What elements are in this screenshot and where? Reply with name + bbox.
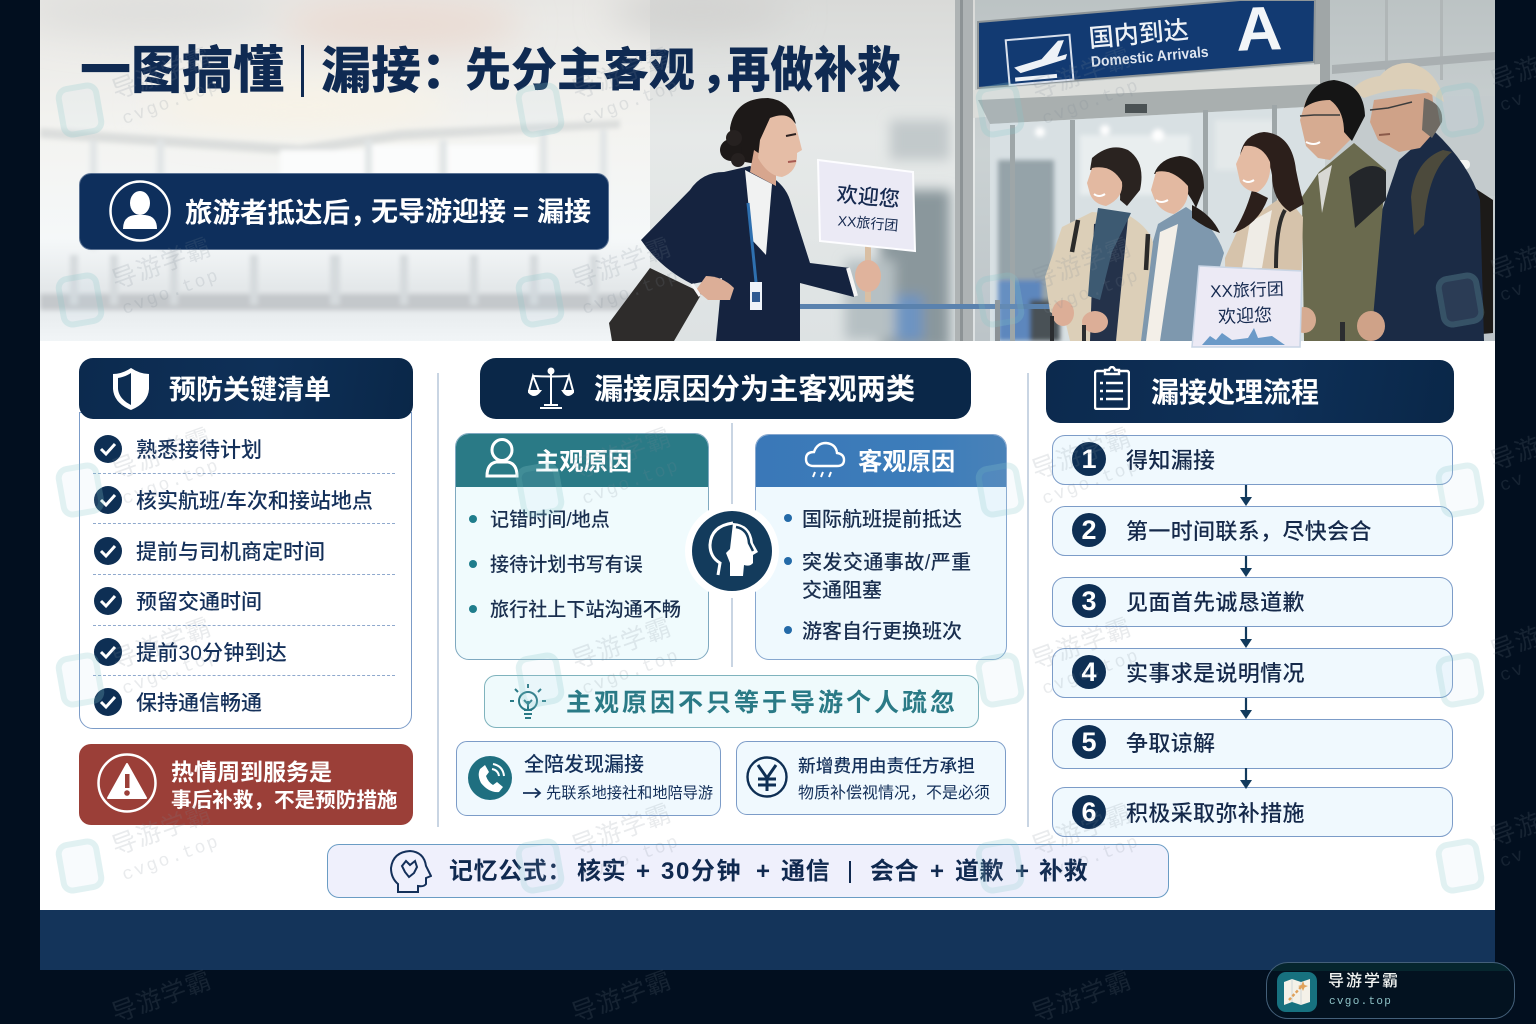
panel: objective causes: 交通阻塞 — [802, 580, 882, 602]
takeaway banner: 主观原因不只等于导游个人疏忽 — [566, 689, 958, 717]
process flow: 得知漏接 — [1126, 448, 1215, 473]
woman 2 — [1141, 156, 1224, 341]
process flow — [1052, 435, 1453, 837]
objective header: 客观原因 — [858, 449, 955, 476]
airport sign — [978, 0, 1315, 88]
man 1 — [1300, 80, 1386, 341]
card: extra cost: 物质补偿视情况，不是必须 — [798, 785, 990, 802]
icon: warning triangle — [97, 753, 157, 813]
group welcome sign: 欢迎您 — [1218, 301, 1272, 329]
watermark overlay: 导游学霸 — [568, 233, 675, 295]
watermark overlay: cvgo.top — [120, 456, 223, 510]
definition text — [185, 197, 591, 228]
panel: objective causes: 游客自行更换班次 — [802, 621, 962, 643]
icon: head split badge — [685, 504, 779, 598]
icon: clipboard — [1094, 366, 1130, 410]
watermark overlay: cv — [1497, 89, 1528, 117]
title: 一图搞懂 — [80, 42, 284, 99]
hero photo illustration: airport arrivals with guide and tour group — [40, 0, 1495, 348]
subjective header: 主观原因 — [535, 449, 632, 476]
formula text: + — [1015, 858, 1029, 885]
icon: bulb — [510, 684, 546, 719]
airport sign: Domestic Arrivals — [1090, 44, 1209, 71]
title: 漏接： — [321, 43, 471, 99]
callout: warning — [79, 744, 413, 825]
formula text: 通信 — [781, 858, 830, 885]
watermark overlay: 导游学霸 — [108, 233, 215, 295]
icon: phone — [468, 756, 512, 800]
watermark overlay: cvgo.top — [580, 456, 683, 510]
formula text: 记忆公式： — [449, 858, 572, 885]
brand badge: cvgo.top — [1329, 996, 1392, 1008]
card: extra cost: 新增费用由责任方承担 — [798, 756, 975, 776]
panel: objective causes — [755, 434, 1007, 660]
checklist header — [79, 358, 413, 419]
watermark overlay: cvgo.top — [1040, 456, 1143, 510]
formula text: 补救 — [1039, 858, 1088, 885]
objective header — [754, 433, 1010, 487]
watermark overlay: cvgo.top — [580, 266, 683, 320]
definition text: 旅游者抵达后， — [185, 197, 378, 228]
watermark overlay: 导游学霸 — [108, 43, 215, 105]
title: 再做补救 — [727, 44, 900, 98]
process flow: 第一时间联系，尽快会合 — [1126, 519, 1372, 544]
woman 1 — [1045, 147, 1153, 341]
watermark overlay: 导游学霸 — [108, 423, 215, 485]
watermark overlay: 导游学霸 — [1028, 423, 1135, 485]
formula text: 核实 — [577, 858, 626, 885]
watermark overlay: 导游学霸 — [1028, 233, 1135, 295]
watermark overlay: 导游学霸 — [568, 423, 675, 485]
man 2 — [1352, 63, 1493, 341]
group welcome sign: XX旅行团 — [1210, 280, 1284, 301]
heading: causes: 漏接原因分为主客观两类 — [594, 374, 915, 406]
icon: person — [109, 180, 171, 242]
process flow: 6 — [1081, 797, 1097, 827]
formula text: 道歉 — [955, 858, 1004, 885]
watermark overlay: cv — [1497, 279, 1528, 307]
formula text: + — [756, 858, 770, 885]
watermark overlay: cvgo.top — [580, 76, 683, 130]
formula text: + — [636, 858, 650, 885]
checklist items: 核实航班/车次和接站地点 — [136, 490, 373, 513]
watermark overlay: cv — [1497, 845, 1528, 873]
watermark overlay: 导游学霸 — [108, 613, 215, 675]
formula text: + — [930, 858, 944, 885]
takeaway banner — [484, 675, 979, 728]
title: ， — [700, 44, 746, 96]
checklist items: 保持通信畅通 — [136, 692, 262, 715]
footer navy band — [40, 910, 1495, 970]
watermark overlay: cvgo.top — [1040, 266, 1143, 320]
watermark overlay: cvgo.top — [120, 76, 223, 130]
process flow: 争取谅解 — [1126, 731, 1215, 756]
panel: objective causes: 国际航班提前抵达 — [802, 509, 962, 531]
checklist items: 预留交通时间 — [136, 591, 262, 614]
checklist items — [93, 435, 395, 716]
card: extra cost — [736, 741, 1006, 815]
panel: prevention checklist — [79, 358, 413, 729]
panel: objective causes: 突发交通事故/严重 — [802, 552, 972, 574]
process flow: 5 — [1081, 727, 1097, 757]
watermark overlay: cvgo.top — [580, 832, 683, 886]
icon: map logo — [1277, 972, 1317, 1012]
process flow: 积极采取弥补措施 — [1126, 801, 1305, 826]
card: escort guide: 全陪发现漏接 — [524, 754, 644, 776]
watermark overlay: cvgo.top — [120, 266, 223, 320]
process flow: 实事求是说明情况 — [1126, 661, 1305, 686]
watermark overlay: cv — [1497, 659, 1528, 687]
definition banner — [79, 173, 609, 250]
watermark overlay: 导游学霸 — [568, 43, 675, 105]
arrow — [523, 788, 542, 798]
checklist body — [79, 412, 412, 729]
card: escort guide — [456, 741, 721, 816]
checklist items: 提前30分钟到达 — [136, 642, 287, 665]
watermark overlay: cvgo.top — [1040, 646, 1143, 700]
callout: warning: 事后补救，不是预防措施 — [171, 789, 398, 812]
watermark overlay: 导游学霸 — [568, 799, 675, 861]
formula text: 会合 — [870, 858, 919, 885]
card divider — [731, 423, 733, 667]
process flow: 3 — [1081, 586, 1097, 616]
guide with welcome sign: 欢迎您 — [836, 178, 901, 214]
title: 先分主客观 — [465, 44, 695, 96]
title — [80, 42, 900, 99]
guide with welcome sign: XX旅行团 — [837, 212, 899, 234]
formula text: 30分钟 — [661, 858, 742, 885]
panel: subjective causes — [455, 433, 709, 660]
brand badge — [1266, 962, 1515, 1019]
watermark overlay: 导游学霸 — [1028, 613, 1135, 675]
panel: subjective causes: 旅行社上下站沟通不畅 — [490, 600, 681, 621]
icon: balance scale — [528, 368, 574, 409]
process flow: 4 — [1081, 657, 1097, 687]
column divider left — [437, 373, 439, 827]
checklist items: 提前与司机商定时间 — [136, 541, 325, 564]
formula text — [449, 858, 1088, 885]
tourist group — [1045, 63, 1493, 341]
card: escort guide: 先联系地接社和地陪导游 — [546, 785, 713, 802]
icon: head with brain — [390, 850, 432, 893]
heading: process — [1046, 360, 1454, 423]
watermark overlay: 导游学霸 — [108, 799, 215, 861]
definition text: 漏接 — [537, 197, 591, 227]
watermark overlay: cvgo.top — [1040, 76, 1143, 130]
watermark overlay: 导游学霸 — [1028, 799, 1135, 861]
definition text: 无导游迎接 — [371, 197, 506, 227]
icon: yen — [746, 756, 788, 798]
airport sign: 国内到达 — [1087, 10, 1190, 55]
process flow: 1 — [1081, 444, 1097, 474]
panel: subjective causes: 记错时间/地点 — [490, 510, 610, 531]
heading: causes — [480, 358, 971, 419]
subjective header — [454, 432, 712, 487]
watermark overlay: cv — [1497, 469, 1528, 497]
guide with welcome sign — [609, 98, 915, 341]
watermark overlay: cvgo.top — [120, 646, 223, 700]
watermark overlay: 导游学霸 — [568, 613, 675, 675]
checklist items: 熟悉接待计划 — [136, 439, 262, 462]
column divider right — [1027, 373, 1029, 827]
process flow: 见面首先诚恳道歉 — [1126, 590, 1305, 615]
group welcome sign — [1192, 266, 1302, 347]
watermark overlay: cvgo.top — [580, 646, 683, 700]
watermark overlay: 导游学霸 — [1028, 43, 1135, 105]
watermark overlay: cvgo.top — [1040, 832, 1143, 886]
checklist header: 预防关键清单 — [169, 375, 331, 405]
panel: subjective causes: 接待计划书写有误 — [490, 555, 643, 576]
watermark overlay: cvgo.top — [120, 832, 223, 886]
memory formula bar — [327, 844, 1169, 898]
definition text: = — [513, 197, 529, 227]
brand badge: 导游学霸 — [1328, 973, 1400, 990]
callout: warning: 热情周到服务是 — [171, 759, 332, 785]
woman 3 — [1225, 132, 1304, 270]
heading: process: 漏接处理流程 — [1151, 377, 1319, 408]
process flow: 2 — [1081, 515, 1097, 545]
